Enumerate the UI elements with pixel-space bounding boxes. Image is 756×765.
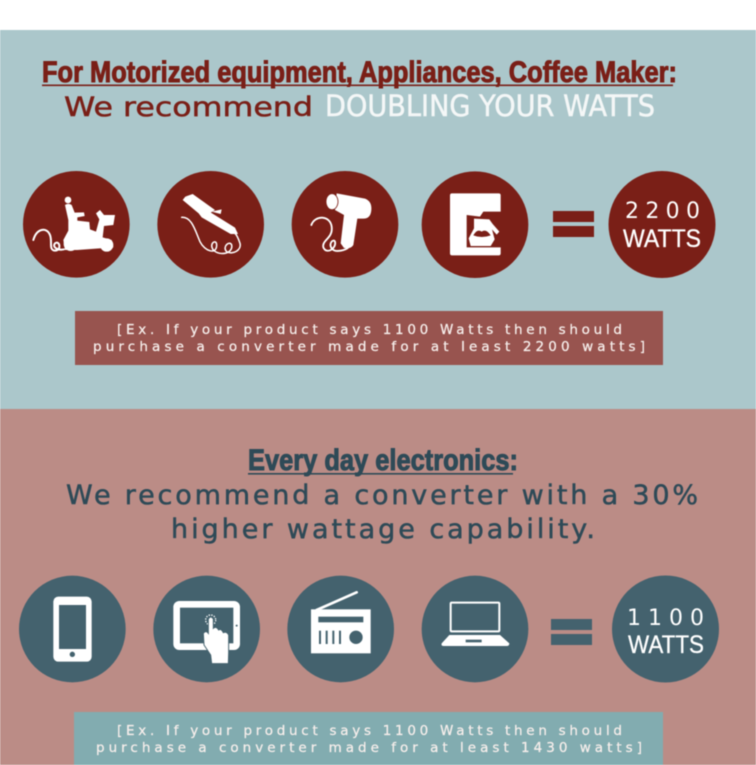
recommendation: 30 percent higher wattage: higher wattage capability. xyxy=(171,514,595,545)
icon: mobility scooter xyxy=(23,171,130,278)
callout: 1430 watt example: purchase a converter made for at least 1430 watts] xyxy=(96,740,642,756)
result: 1100 watts xyxy=(612,576,719,682)
callout: 1430 watt example: [Ex. If your product says 1100 Watts then should xyxy=(117,723,622,739)
recommendation: 30 percent higher wattage xyxy=(66,480,698,545)
icon: coffee maker xyxy=(422,171,528,278)
panel: motorized equipment xyxy=(0,30,756,409)
recommendation: doubling your watts: DOUBLING YOUR WATTS xyxy=(325,89,655,123)
result: 1100 watts: 1100 xyxy=(627,606,704,631)
recommendation: 30 percent higher wattage: We recommend a converter with a 30% xyxy=(66,480,698,511)
icon: radio xyxy=(287,576,394,682)
heading: every day electronics: Every day electronics: xyxy=(248,444,518,477)
callout: 2200 watt example xyxy=(75,311,663,365)
icon: equals sign xyxy=(551,619,592,645)
icon: smartphone xyxy=(19,576,126,682)
callout: 1430 watt example xyxy=(74,712,663,765)
icon: curling iron xyxy=(157,171,264,278)
icon: hair dryer xyxy=(292,171,398,278)
result: 2200 watts xyxy=(608,171,716,278)
result: 2200 watts: 2200 xyxy=(625,199,700,224)
recommendation: doubling your watts: We recommend xyxy=(64,92,313,123)
recommendation: doubling your watts xyxy=(64,89,655,123)
result: 2200 watts: WATTS xyxy=(623,225,701,253)
icon: equals sign xyxy=(553,211,594,237)
callout: 2200 watt example: purchase a converter made for at least 2200 watts] xyxy=(93,339,645,355)
icon: laptop xyxy=(422,576,528,682)
callout: 2200 watt example: [Ex. If your product says 1100 Watts then should xyxy=(117,322,622,338)
result: 1100 watts: WATTS xyxy=(628,631,704,659)
icon: tablet with touching hand xyxy=(153,576,260,682)
panel: every day electronics xyxy=(0,409,756,765)
